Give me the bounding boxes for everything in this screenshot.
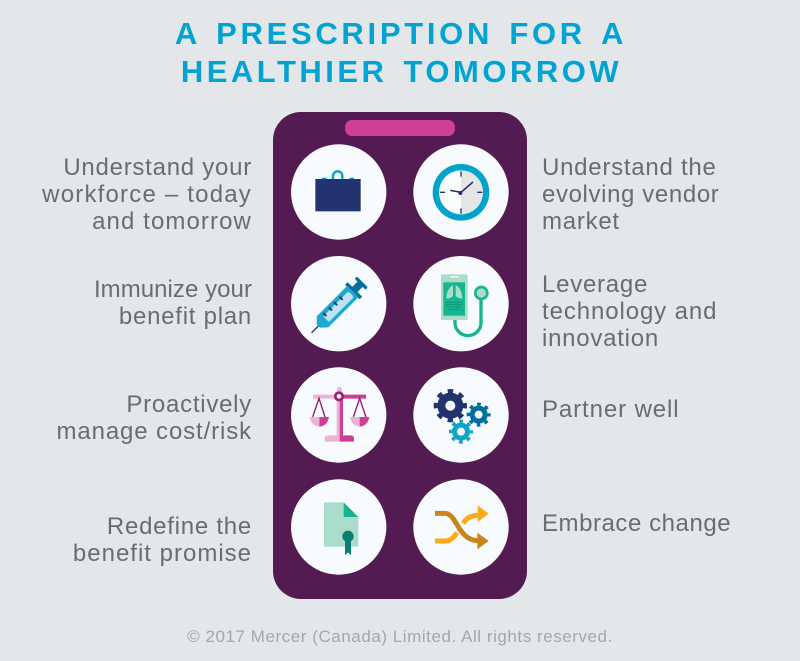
label: redefine the benefit promise: Redefine the bbox=[107, 513, 252, 540]
icon: clock bbox=[433, 164, 489, 221]
label: immunize your benefit plan: Immunize your bbox=[94, 276, 252, 303]
title: HEALTHIER TOMORROW bbox=[181, 54, 622, 89]
icon: gears bbox=[436, 391, 489, 442]
label: understand the evolving vendor market: market bbox=[542, 208, 620, 235]
label: understand your workforce: Understand your bbox=[63, 154, 252, 181]
label: proactively manage cost/risk: manage cost/risk bbox=[56, 418, 252, 445]
icon: document with ribbon bbox=[324, 502, 358, 555]
icon: scales bbox=[310, 387, 369, 442]
phone body bbox=[273, 112, 527, 599]
label: proactively manage cost/risk: Proactively bbox=[126, 391, 252, 418]
label: understand your workforce: workforce – today bbox=[42, 181, 252, 208]
label: immunize your benefit plan bbox=[94, 276, 252, 330]
label: understand your workforce bbox=[42, 154, 252, 235]
label: leverage technology and innovation: Leverage bbox=[542, 271, 648, 298]
label: proactively manage cost/risk bbox=[56, 391, 252, 445]
label: partner well: Partner well bbox=[542, 396, 680, 423]
label: understand the evolving vendor market: evolving vendor bbox=[542, 181, 719, 208]
label: leverage technology and innovation: technology and bbox=[542, 298, 717, 325]
label: immunize your benefit plan: benefit plan bbox=[119, 303, 252, 330]
phone speaker pill bbox=[345, 120, 455, 136]
label: redefine the benefit promise: benefit promise bbox=[73, 540, 252, 567]
label: understand the evolving vendor market: Understand the bbox=[542, 154, 717, 181]
title: A PRESCRIPTION FOR A bbox=[175, 16, 627, 51]
label: understand the evolving vendor market bbox=[542, 154, 719, 235]
title bbox=[175, 16, 627, 89]
label: leverage technology and innovation: innovation bbox=[542, 325, 659, 352]
icon circles bbox=[291, 144, 509, 575]
icon: phone stethoscope bbox=[441, 274, 489, 336]
label: leverage technology and innovation bbox=[542, 271, 717, 352]
copyright footer: © 2017 Mercer (Canada) Limited. All rights reserved. bbox=[187, 627, 613, 646]
icon: briefcase bbox=[315, 171, 361, 211]
icon: syringe bbox=[304, 275, 370, 340]
icon: shuffle arrows bbox=[435, 505, 489, 549]
label: redefine the benefit promise bbox=[73, 513, 252, 567]
label: embrace change: Embrace change bbox=[542, 510, 731, 537]
label: understand your workforce: and tomorrow bbox=[92, 208, 252, 235]
